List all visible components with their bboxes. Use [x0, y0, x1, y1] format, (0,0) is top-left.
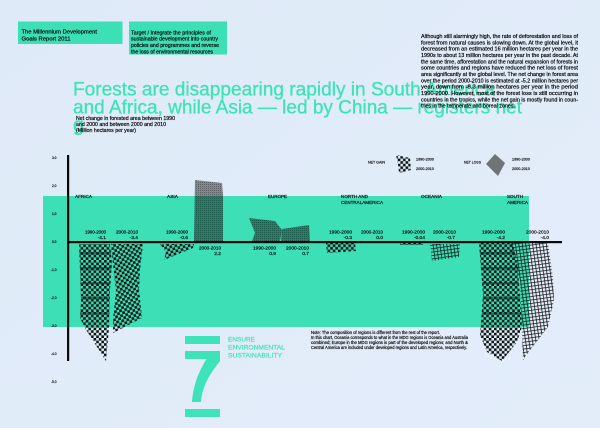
- axis tick labels: -2.0: [51, 296, 57, 300]
- period and value labels: 2000-2010: [286, 246, 309, 252]
- text block: body copy: over the period 2000-2010 is estimated at -5.2 million hectares per: [421, 78, 578, 84]
- axis tick labels: -5.0: [51, 380, 57, 384]
- region labels: OCEANIA: [421, 194, 443, 200]
- axis tick labels: 0.0: [52, 240, 57, 244]
- period and value labels: 1990-2000: [482, 230, 505, 236]
- legend: net loss: NET LOSS: [464, 160, 482, 164]
- legend: net gain: 1990-2000: [416, 158, 434, 162]
- period and value labels: -4.2: [497, 235, 505, 241]
- header: report name box: [18, 22, 122, 44]
- goal 7 number mark: [185, 336, 220, 417]
- period and value labels: -3.4: [130, 235, 138, 241]
- period and value labels: 1990-2000: [166, 230, 188, 236]
- note: [311, 330, 469, 350]
- bars: North and Central America: [326, 243, 356, 253]
- period and value labels: 1990-2000: [329, 230, 352, 236]
- panel: green chart band: [43, 196, 529, 327]
- note: In this chart, Oceania corresponds to what in the MDG regions is Oceania and Australia: [311, 335, 469, 340]
- period and value labels: -0.3: [344, 235, 352, 241]
- period and value labels: 2000-2010: [433, 230, 456, 236]
- period and value labels: -0.6: [180, 235, 188, 241]
- text block: body copy: countries in the tropics, while the net gain is mostly found in coun-: [421, 97, 578, 103]
- region labels: EUROPE: [268, 194, 288, 200]
- goal 7 label: ENVIRONMENTAL: [228, 344, 285, 352]
- header: target box: sustainable development into country: [131, 37, 218, 43]
- vertical axis: [67, 155, 69, 361]
- chart subtitle: (Million hectares per year): [76, 128, 136, 134]
- legend: net gain: [368, 155, 434, 173]
- region labels: ASIA: [167, 194, 179, 200]
- text block: body copy: Although still alarmingly high, the rate of deforestation and loss of: [421, 34, 578, 40]
- text block: body copy: some countries and regions have reduced the net loss of forest: [421, 66, 578, 72]
- axis tick labels: 3.0: [52, 156, 57, 160]
- period and value labels: 1990-2000: [402, 230, 425, 236]
- bars: Europe: [249, 218, 310, 241]
- period and value labels: 2000-2010: [361, 230, 383, 236]
- goal 7 label: SUSTAINABILITY: [228, 352, 283, 360]
- chart subtitle: [76, 116, 175, 134]
- axis tick labels: -1.0: [51, 268, 57, 272]
- period and value labels: 0.9: [269, 251, 276, 257]
- axis tick labels: -4.0: [51, 352, 57, 356]
- axis tick labels: [51, 156, 57, 384]
- text block: body copy: tries in the temperate and boreal zones.: [421, 104, 515, 110]
- text block: body copy: decreased from an estimated 16 million hectares per year in the: [421, 47, 578, 53]
- text block: body copy: year, down from -8.3 million hectares per year in the period: [421, 85, 578, 91]
- period and value labels: -0.7: [447, 235, 455, 241]
- period and value labels: 0.0: [376, 235, 383, 241]
- period and value labels: [85, 230, 549, 257]
- period and value labels: 2000-2010: [116, 230, 138, 236]
- period and value labels: 1990-2000: [253, 246, 276, 252]
- region labels: NORTH AND: [341, 194, 368, 200]
- header: target box: the loss of environmental resources: [131, 49, 213, 55]
- text block: body copy: the same time, afforestation and the natural expansion of forests in: [421, 59, 578, 65]
- title: Forests are disappearing rapidly in South America: [73, 79, 495, 101]
- period and value labels: 2000-2010: [199, 246, 221, 252]
- chart subtitle: Net change in forested area between 1990: [76, 116, 175, 122]
- axis tick labels: 1.0: [52, 212, 57, 216]
- title: g: [73, 114, 84, 136]
- header: report name box: The Millennium Development: [22, 30, 97, 36]
- text block: body copy: [421, 34, 579, 110]
- chart subtitle: and 2000 and between 2000 and 2010: [76, 122, 166, 128]
- header: target box: [129, 22, 227, 55]
- note: Central America are included under developed regions and Latin America, respectively.: [311, 345, 467, 350]
- bars: Africa: [79, 244, 143, 361]
- note: Note: The composition of regions is different from the rest of the report.: [311, 330, 440, 335]
- region labels: AMERICA: [507, 200, 529, 206]
- text block: body copy: 1990-2000. However, most of the forest loss is still occurring in: [421, 91, 578, 97]
- header: report name box: Goals Report 2011: [22, 36, 70, 42]
- region labels: [75, 194, 529, 206]
- region labels: SOUTH: [507, 194, 523, 200]
- period and value labels: -0.04: [414, 235, 425, 241]
- legend: net gain: NET GAIN: [368, 160, 385, 164]
- period and value labels: -4.1: [98, 235, 106, 241]
- note: combined; Europe in the MDG regions is part of the developed regions; and North &: [311, 340, 468, 345]
- horizontal axis: [68, 241, 562, 243]
- bars: Oceania: [400, 243, 460, 261]
- goal 7 label: ENSURE: [228, 336, 256, 344]
- region labels: AFRICA: [75, 194, 93, 200]
- period and value labels: 2000-2010: [526, 230, 549, 236]
- period and value labels: 2.2: [214, 251, 221, 257]
- period and value labels: -4.0: [541, 235, 549, 241]
- axis tick labels: -3.0: [51, 324, 57, 328]
- legend: net loss: [464, 154, 530, 176]
- legend: net loss: 2000-2010: [512, 167, 530, 171]
- header: target box: policies and programmes and reverse: [131, 43, 219, 49]
- title: and Africa, while Asia — led by China — registers net: [73, 96, 523, 118]
- period and value labels: 1990-2000: [85, 230, 106, 236]
- legend: net gain: 2000-2010: [416, 167, 434, 171]
- region labels: CENTRALAMERICA: [341, 200, 384, 206]
- header: target box: Target / Integrate the principles of: [131, 30, 211, 36]
- chart: forest change by region: [51, 155, 562, 384]
- axis tick labels: 2.0: [52, 184, 57, 188]
- text block: body copy: 1990s to about 13 million hectares per year in the past decade. At: [421, 53, 578, 59]
- goal 7 label: [228, 336, 285, 360]
- period and value labels: 0.7: [302, 251, 309, 257]
- title: [73, 79, 523, 136]
- bars: Asia: [160, 180, 223, 260]
- text block: body copy: area significantly at the global level. The net change in forest area: [421, 72, 579, 78]
- text block: body copy: forest from natural causes is slowing down. At the global level, it: [421, 40, 578, 46]
- legend: net loss: 1990-2000: [512, 158, 530, 162]
- bars: South America: [479, 243, 554, 361]
